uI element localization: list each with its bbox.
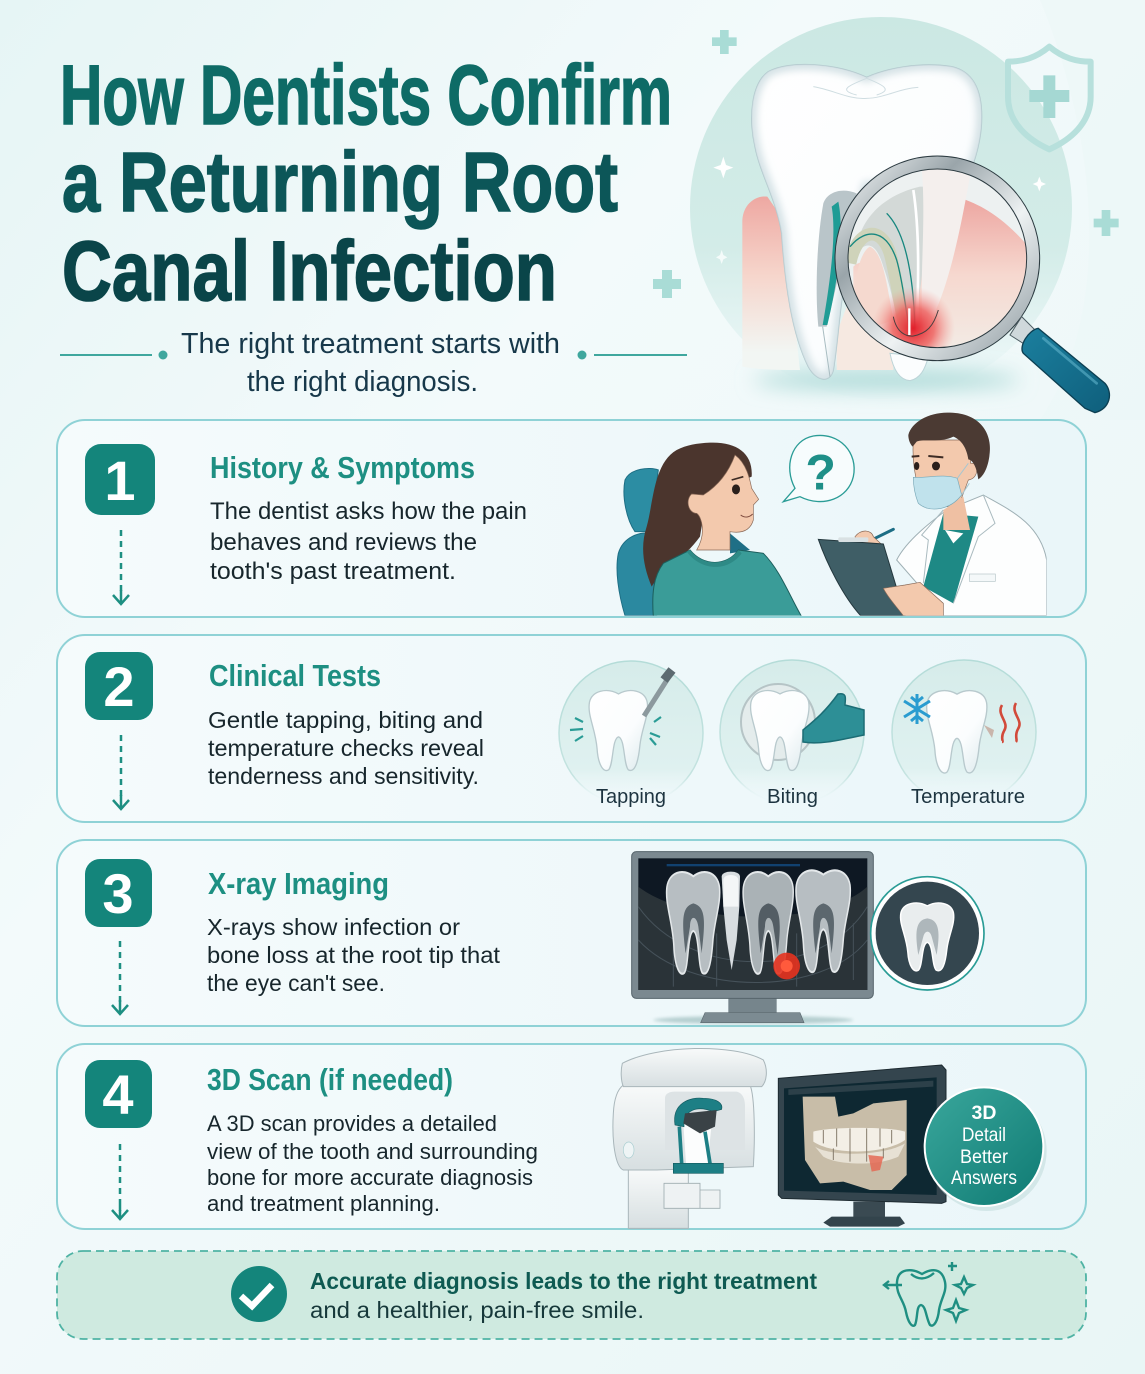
step 4 text: view of the tooth and surrounding <box>207 1139 538 1164</box>
icon: tooth with sparkles <box>884 1262 973 1326</box>
doctor coat <box>897 495 1047 616</box>
icon: tapping <box>559 661 703 808</box>
step 3 badge: 3 <box>102 862 134 925</box>
step 2 badge: 2 <box>103 655 135 718</box>
subtitle with decorative rules <box>60 328 687 398</box>
scanner top cap <box>621 1048 766 1087</box>
magnifier ring <box>841 162 1033 354</box>
panel: step 1 history and symptoms <box>57 413 1086 617</box>
step 1 text: behaves and reviews the <box>210 529 477 556</box>
icon: temperature <box>892 660 1036 808</box>
step 3 text <box>207 914 501 996</box>
conclusion text <box>310 1268 817 1323</box>
badge text: Better <box>960 1146 1008 1168</box>
subtitle with decorative rules: the right diagnosis. <box>247 366 478 398</box>
step 1 heading: History & Symptoms <box>210 450 475 485</box>
panel: step 2 clinical tests <box>57 635 1086 822</box>
step 2 text: tenderness and sensitivity. <box>208 763 479 789</box>
step 3 badge <box>85 859 152 927</box>
step 4 badge <box>85 1060 152 1128</box>
badge text <box>951 1102 1017 1189</box>
conclusion text: and a healthier, pain-free smile. <box>310 1297 644 1323</box>
title <box>60 48 672 318</box>
doctor hair <box>908 413 990 479</box>
panel: step 4 3D scan <box>57 1044 1086 1229</box>
scanner arm <box>613 1085 754 1170</box>
conclusion text: Accurate diagnosis leads to the right treatment <box>310 1268 817 1294</box>
gum left <box>742 196 800 370</box>
icon: shield with plus <box>1008 47 1091 149</box>
icon: plus near title <box>653 270 681 298</box>
icon: biting <box>720 660 864 808</box>
canal left <box>817 191 857 327</box>
hero illustration: tooth under magnifying glass <box>690 17 1119 413</box>
tooth <box>752 65 982 379</box>
icon: check mark <box>231 1266 287 1322</box>
step 1 text: The dentist asks how the pain <box>210 498 527 525</box>
step 1 badge: 1 <box>104 449 136 512</box>
lens content <box>848 170 1026 348</box>
badge text: 3D <box>972 1102 996 1124</box>
doctor face <box>913 440 977 507</box>
step 3 text: X-rays show infection or <box>207 914 460 940</box>
badge text: Answers <box>951 1167 1017 1189</box>
step 4 text <box>207 1111 538 1216</box>
title: How Dentists Confirm <box>60 48 672 142</box>
icon: temperature: Temperature <box>911 786 1025 808</box>
step 1 text: tooth's past treatment. <box>210 558 456 585</box>
hand on clipboard <box>883 582 943 616</box>
step 2 heading: Clinical Tests <box>209 658 381 693</box>
step 4 badge: 4 <box>102 1063 134 1126</box>
mask <box>913 476 962 509</box>
callout: conclusion banner <box>57 1251 1086 1339</box>
step 3 arrow <box>112 941 128 1014</box>
step 4 text: A 3D scan provides a detailed <box>207 1111 497 1136</box>
title: Canal Infection <box>62 224 557 318</box>
panel: step 3 x-ray imaging <box>57 840 1086 1026</box>
hair <box>643 443 752 587</box>
monitor 3D <box>853 1202 885 1218</box>
icon: biting: Biting <box>767 786 818 808</box>
illustration: patient and dentist: ? <box>805 444 836 500</box>
step 4 heading: 3D Scan (if needed) <box>207 1062 453 1097</box>
step 1 badge <box>85 444 155 515</box>
icon: tapping: Tapping <box>596 786 666 808</box>
illustration: patient and dentist <box>617 413 1047 617</box>
step 4 arrow <box>112 1144 128 1219</box>
step 2 arrow <box>113 735 129 809</box>
3D badge <box>925 1087 1047 1211</box>
clipboard <box>818 539 905 616</box>
step 3 text: bone loss at the root tip that <box>207 942 501 968</box>
magnifier handle <box>1010 317 1038 347</box>
step 1 text <box>210 498 527 585</box>
step 1 arrow <box>113 530 129 604</box>
badge text: Detail <box>962 1124 1006 1146</box>
scanner column <box>628 1168 688 1228</box>
step 4 text: bone for more accurate diagnosis <box>207 1165 533 1190</box>
teal head support <box>675 1098 722 1127</box>
title: a Returning Root <box>62 135 618 229</box>
subtitle with decorative rules: The right treatment starts with <box>181 328 560 360</box>
zoom tooth circle <box>871 877 984 990</box>
jaw <box>803 1097 907 1190</box>
step 2 badge <box>85 652 153 720</box>
step 2 text: Gentle tapping, biting and <box>208 707 483 733</box>
pen and hand <box>875 529 893 538</box>
sweater <box>653 550 802 617</box>
illustration: CBCT scanner and 3D monitor <box>613 1048 1047 1228</box>
speech bubble <box>783 435 854 502</box>
step 3 heading: X-ray Imaging <box>208 866 389 901</box>
right root <box>890 353 928 381</box>
chair <box>624 468 658 532</box>
illustration: x-ray monitor <box>632 852 984 1024</box>
step 3 text: the eye can't see. <box>207 970 385 996</box>
step 2 text <box>208 707 484 789</box>
decorative plus and sparkles <box>712 30 737 54</box>
step 4 text: and treatment planning. <box>207 1191 440 1216</box>
face <box>688 455 759 550</box>
step 2 text: temperature checks reveal <box>208 735 484 761</box>
